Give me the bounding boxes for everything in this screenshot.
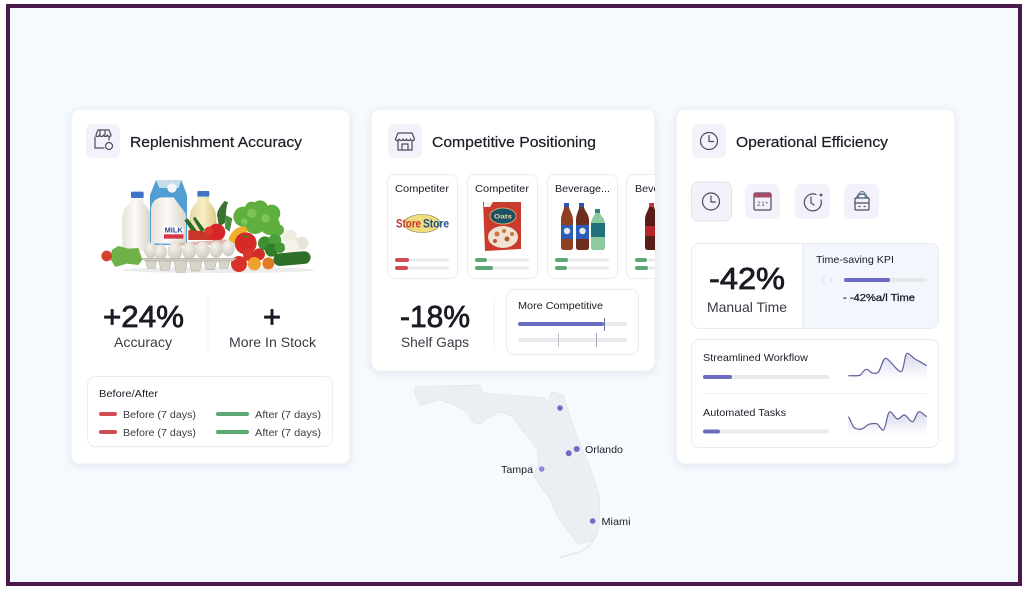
product card: store logo: Store [423, 216, 449, 230]
marker: tampa: Tampa [501, 464, 533, 476]
metric: shelf gaps: -18% [400, 299, 470, 334]
tab: calendar [745, 184, 780, 219]
tab: clock selected [692, 182, 732, 221]
metric: shelf gaps [400, 299, 470, 350]
product card: store logo: Store [396, 216, 421, 230]
metric: more in stock: + [263, 299, 281, 334]
metric: more in stock: More In Stock [229, 334, 317, 350]
row: streamlined workflow [703, 352, 927, 380]
legend: before and after: After (7 days) [255, 427, 321, 439]
product card: clipped beverage: Beverage... [635, 183, 690, 195]
tab: calendar: 21* [757, 201, 768, 208]
marker: orlando [566, 444, 623, 456]
icon: clock [692, 124, 726, 158]
row: automated tasks: Automated Tasks [703, 407, 786, 419]
product card: clipped beverage [626, 174, 655, 279]
metric: accuracy [103, 299, 184, 350]
product card: cereal box: Oats [494, 214, 512, 220]
illustration: groceries: MILK [165, 226, 183, 235]
heading: Operational Efficiency [736, 134, 889, 151]
product card: store logo: Competiter [395, 183, 450, 195]
marker: north [557, 405, 563, 411]
marker: orlando: Orlando [585, 444, 623, 456]
product card: beverages [548, 174, 618, 278]
row: streamlined workflow: Streamlined Workflow [703, 352, 808, 364]
product card: cereal box [468, 174, 538, 278]
KPI box: manual time: Manual Time [707, 299, 787, 315]
product card: beverages: Beverage... [555, 183, 610, 195]
legend: before and after [88, 376, 332, 446]
icon: store with clock [86, 124, 120, 158]
product card: store logo [388, 174, 458, 278]
panel: operational efficiency [676, 109, 955, 464]
panel: competitive positioning [370, 108, 656, 374]
KPI box: manual time: -42% [709, 261, 785, 296]
KPI box: manual time [692, 244, 938, 328]
heading: Competitive Positioning [432, 134, 596, 151]
heading: Replenishment Accuracy [130, 134, 303, 151]
chart: more competitive: More Competitive [518, 300, 603, 312]
marker: miami: Miami [602, 516, 630, 528]
icon: storefront [388, 124, 422, 158]
KPI box: manual time: Time-saving KPI [816, 254, 894, 266]
legend: before and after: Before (7 days) [123, 427, 196, 439]
row: automated tasks [703, 407, 927, 435]
legend: before and after: Before (7 days) [123, 409, 196, 421]
chart: more competitive [506, 290, 638, 354]
panel: replenishment accuracy [71, 109, 350, 464]
marker: miami [590, 516, 630, 528]
illustration: groceries [101, 180, 315, 273]
metric: shelf gaps: Shelf Gaps [401, 334, 469, 350]
tab: clipboard [844, 184, 879, 219]
legend: before and after: Before/After [99, 388, 159, 400]
map: florida [415, 385, 630, 558]
metric: more in stock [229, 299, 317, 350]
metric: accuracy: +24% [103, 299, 184, 334]
legend: before and after: After (7 days) [255, 409, 321, 421]
tab: clock with dot [795, 184, 830, 219]
product card: cereal box: Competiter [475, 183, 530, 195]
KPI box: manual time: - -42%a/l Time [843, 292, 915, 304]
metric: accuracy: Accuracy [114, 334, 172, 350]
list box: workflow and tasks [692, 340, 938, 448]
